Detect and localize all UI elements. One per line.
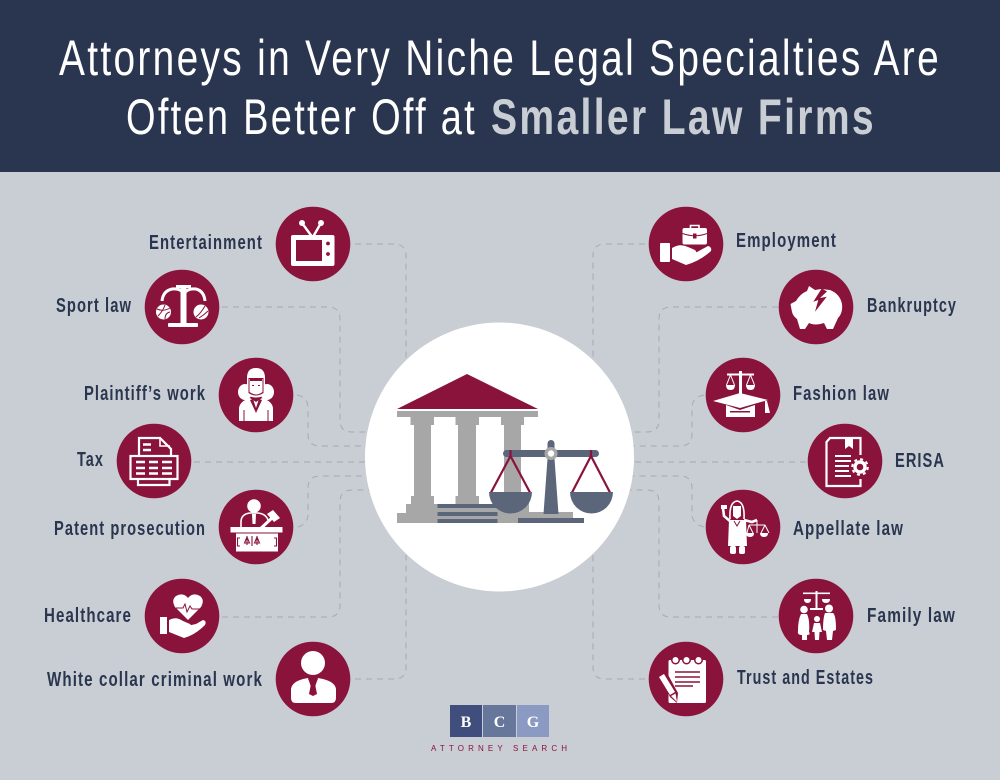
title line two: Often Better Off at <box>126 89 477 145</box>
courthouse <box>397 374 538 523</box>
item: Healthcare: Healthcare <box>44 604 132 627</box>
icon: scales with balls <box>156 285 208 327</box>
item: Entertainment <box>149 207 350 281</box>
central illustration: courthouse and scales <box>365 322 634 592</box>
item: Tax <box>77 424 191 498</box>
icon: judge at desk <box>230 499 282 552</box>
item: Healthcare <box>44 579 219 653</box>
BCG Attorney Search logo: ATTORNEY SEARCH <box>431 744 567 753</box>
dashed connectors <box>194 244 806 679</box>
BCG Attorney Search logo: B <box>461 714 472 731</box>
header banner <box>0 0 1000 172</box>
BCG Attorney Search logo: G <box>527 714 540 731</box>
item: Fashion law: Fashion law <box>793 382 890 405</box>
BCG Attorney Search logo: C <box>494 714 505 731</box>
item: ERISA <box>808 424 945 498</box>
item: Patent prosecution <box>54 490 293 564</box>
item: Sport law: Sport law <box>56 294 132 317</box>
icon: document with gear <box>826 438 868 486</box>
icon: family with scales <box>798 591 836 640</box>
item: Appellate law <box>706 490 904 564</box>
icon: television <box>291 220 334 266</box>
icon: broken piggy bank <box>790 286 842 329</box>
item: Entertainment: Entertainment <box>149 231 263 254</box>
icon: notepad and pen <box>659 656 706 703</box>
item: Trust and Estates: Trust and Estates <box>737 666 874 689</box>
icon: woman attorney <box>238 368 274 421</box>
item: Appellate law: Appellate law <box>793 517 904 540</box>
icon: lawyer holding scales <box>721 501 769 554</box>
item: ERISA: ERISA <box>895 449 945 472</box>
item: Family law: Family law <box>867 604 956 627</box>
icon: heart in hand <box>160 594 206 638</box>
icon: briefcase in hand <box>660 226 711 265</box>
item: Trust and Estates <box>649 642 874 716</box>
icon: scales and graduation cap <box>713 371 770 417</box>
item: Employment <box>649 207 837 281</box>
item: White collar criminal work: White collar criminal work <box>47 668 263 691</box>
title highlight: Smaller Law Firms <box>491 89 876 145</box>
item: Tax: Tax <box>77 448 104 471</box>
item: Sport law <box>56 270 219 344</box>
item: Fashion law <box>706 358 890 432</box>
icon: tax form printer <box>130 438 178 485</box>
item: White collar criminal work <box>47 642 350 716</box>
icon: businessman <box>291 651 336 703</box>
item: Employment: Employment <box>736 229 837 252</box>
item: Bankruptcy <box>779 270 957 344</box>
balance scale <box>489 440 613 523</box>
item: Bankruptcy: Bankruptcy <box>867 294 957 317</box>
item: Plaintiff's work <box>84 358 293 432</box>
item: Patent prosecution: Patent prosecution <box>54 517 206 540</box>
item: Family law <box>779 579 956 653</box>
BCG Attorney Search logo <box>431 705 567 753</box>
item: Plaintiff's work: Plaintiff’s work <box>84 382 206 405</box>
